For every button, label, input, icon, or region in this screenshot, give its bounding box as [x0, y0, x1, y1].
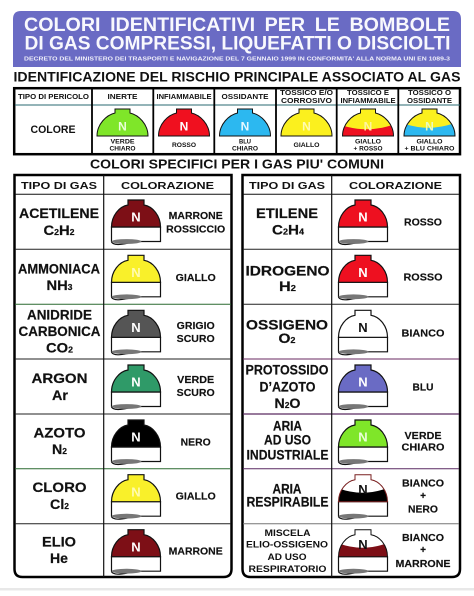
- header labels: INFIAMMABILE: [340, 98, 396, 105]
- row: ammoniaca: [18, 255, 216, 300]
- column headers: [21, 180, 214, 192]
- icon: tossico infiammabile: N: [364, 120, 372, 134]
- row: miscela elio-ossigeno: ELIO-OSSIGENO: [246, 540, 328, 551]
- row: anidride carbonica: ANIDRIDE: [27, 307, 92, 322]
- row: elio: MARRONE: [169, 546, 223, 557]
- row: ossigeno: BIANCO: [402, 329, 445, 340]
- row: cloro: CLORO: [32, 480, 86, 495]
- row: elio: [42, 530, 223, 574]
- icon: tossico corrosivo: GIALLO: [294, 142, 320, 149]
- row: aria uso industriale: ARIA: [273, 419, 302, 434]
- row: protossido d'azoto: [246, 362, 434, 411]
- row: cloro: N: [131, 484, 141, 499]
- row: ossigeno: [246, 310, 445, 355]
- header labels: INERTE: [108, 94, 138, 101]
- icon: inerte: [97, 109, 148, 152]
- icon: tossico infiammabile: [342, 108, 394, 150]
- icon: inerte: CHIARO: [110, 146, 136, 152]
- row: ossigeno: N: [358, 320, 368, 335]
- row: protossido d'azoto: BLU: [412, 383, 434, 394]
- icon: tossico ossidante: N: [425, 120, 434, 134]
- column headers: COLORAZIONE: [349, 180, 442, 192]
- row: argon: VERDE: [177, 375, 215, 386]
- row: idrogeno: ROSSO: [404, 273, 443, 284]
- header labels: TIPO DI PERICOLO: [18, 94, 90, 101]
- row: idrogeno: N: [358, 265, 368, 280]
- row: aria uso industriale: N: [358, 430, 368, 445]
- icon: tossico ossidante: [404, 108, 456, 150]
- row: azoto: N: [131, 430, 141, 445]
- row: anidride carbonica: CARBONICA: [18, 324, 101, 339]
- row: acetilene: MARRONE: [169, 211, 223, 222]
- icon: tossico ossidante: GIALLO: [416, 138, 443, 146]
- icon: inerte: N: [118, 120, 127, 134]
- row: etilene: ETILENE: [256, 206, 318, 221]
- row: idrogeno: H2: [279, 279, 297, 294]
- icon: ossidante: BLU: [239, 138, 251, 146]
- header labels: CORROSIVO: [281, 98, 333, 105]
- row: aria uso industriale: INDUSTRIALE: [246, 447, 328, 462]
- row: argon: ARGON: [32, 371, 88, 386]
- row: miscela elio-ossigeno: MARRONE: [396, 559, 451, 570]
- row: cloro: GIALLO: [176, 492, 216, 503]
- row: aria uso industriale: CHIARO: [402, 443, 445, 454]
- row: elio: ELIO: [42, 535, 76, 550]
- column headers: TIPO DI GAS: [249, 180, 325, 192]
- row: acetilene: [19, 200, 225, 244]
- header labels: TOSSICO O: [408, 90, 452, 97]
- row: ammoniaca: NH3: [46, 278, 73, 293]
- row: anidride carbonica: [18, 307, 215, 356]
- row: azoto: NERO: [181, 438, 211, 449]
- row: miscela elio-ossigeno: +: [420, 545, 426, 556]
- row: etilene: [256, 200, 442, 244]
- row: etilene: N: [358, 210, 368, 225]
- icon: inerte: VERDE: [110, 138, 135, 146]
- row: anidride carbonica: SCURO: [177, 334, 215, 345]
- icon: tossico corrosivo: N: [302, 120, 311, 134]
- icon: infiammabile: ROSSO: [172, 142, 196, 149]
- row: aria respirabile: N: [358, 482, 368, 497]
- icon: tossico infiammabile: GIALLO: [355, 138, 381, 146]
- header labels: [18, 90, 452, 105]
- row: aria respirabile: NERO: [408, 505, 438, 516]
- row: etilene: C2H4: [272, 222, 305, 237]
- row: ammoniaca: AMMONIACA: [18, 261, 100, 276]
- row: acetilene: C2H2: [44, 223, 75, 238]
- header labels: OSSIDANTE: [222, 94, 269, 101]
- title banner: [13, 11, 461, 67]
- row: argon: SCURO: [177, 388, 215, 399]
- row: miscela elio-ossigeno: [246, 528, 451, 575]
- icon: ossidante: [220, 109, 270, 152]
- row: acetilene: N: [131, 210, 141, 225]
- column headers: COLORAZIONE: [121, 180, 214, 192]
- row: ammoniaca: N: [131, 265, 141, 280]
- heading: specific colours: COLORI SPECIFICI PER I GAS PIU' COMUNI: [90, 156, 384, 172]
- icon: ossidante: N: [241, 120, 249, 134]
- row: aria respirabile: RESPIRABILE: [246, 494, 328, 509]
- panel: hazard table: [14, 88, 460, 154]
- decree subtitle: DECRETO DEL MINISTERO DEI TRASPORTI E NAVIGAZIONE DEL 7 GENNAIO 1999 IN CONFORMITA' ALLA NORMA UNI EN 1089-3: [24, 56, 450, 62]
- row: idrogeno: [246, 255, 443, 300]
- row: miscela elio-ossigeno: RESPIRATORIO: [248, 564, 326, 575]
- row: azoto: [34, 420, 211, 464]
- title line 2: DI GAS COMPRESSI, LIQUEFATTI O DISCIOLTI: [24, 34, 450, 54]
- icon: tossico infiammabile: + ROSSO: [354, 146, 383, 152]
- column headers: [249, 180, 442, 192]
- row: azoto: AZOTO: [34, 425, 86, 440]
- row: protossido d'azoto: N: [358, 375, 368, 390]
- row: aria respirabile: +: [420, 491, 426, 502]
- row: elio: He: [50, 551, 69, 566]
- row: etilene: ROSSO: [404, 218, 442, 229]
- row: argon: Ar: [52, 388, 69, 403]
- panel: left gas table: [14, 175, 232, 577]
- row: anidride carbonica: GRIGIO: [177, 321, 215, 332]
- row: elio: N: [131, 539, 141, 554]
- row: miscela elio-ossigeno: MISCELA: [264, 528, 311, 539]
- row: miscela elio-ossigeno: AD USO: [268, 552, 306, 563]
- row: anidride carbonica: N: [131, 320, 141, 335]
- row: aria uso industriale: [246, 419, 445, 464]
- column headers: TIPO DI GAS: [21, 180, 97, 192]
- icon: tossico corrosivo: [281, 109, 332, 149]
- row: miscela elio-ossigeno: BIANCO: [402, 533, 444, 544]
- title line 1: COLORI IDENTIFICATIVI PER LE BOMBOLE: [24, 15, 450, 36]
- row: aria respirabile: [246, 475, 444, 519]
- row: miscela elio-ossigeno: N: [358, 537, 368, 552]
- icon: infiammabile: [158, 109, 210, 149]
- row: acetilene: ACETILENE: [19, 206, 99, 221]
- row: aria uso industriale: AD USO: [264, 433, 311, 448]
- heading: risk identification: IDENTIFICAZIONE DEL RISCHIO PRINCIPALE ASSOCIATO AL GAS: [14, 70, 460, 84]
- header labels: TOSSICO E: [347, 90, 389, 97]
- row: aria respirabile: BIANCO: [402, 478, 444, 489]
- row: azoto: N2: [52, 442, 68, 457]
- row: aria respirabile: ARIA: [272, 482, 302, 497]
- row: argon: N: [131, 375, 141, 390]
- row: idrogeno: IDROGENO: [246, 264, 330, 279]
- page bottom band: [0, 588, 474, 590]
- row: aria uso industriale: VERDE: [404, 431, 442, 442]
- header labels: TOSSICO E/O: [280, 90, 334, 97]
- panel: right gas table: [242, 175, 460, 577]
- icon: tossico ossidante: + BLU CHIARO: [404, 146, 455, 152]
- row: ossigeno: O2: [278, 331, 296, 346]
- icon: infiammabile: N: [180, 120, 188, 134]
- row: ossigeno: OSSIGENO: [246, 317, 328, 332]
- row: protossido d'azoto: PROTOSSIDO: [246, 362, 328, 377]
- icon: ossidante: CHIARO: [232, 146, 258, 152]
- row: cloro: [32, 475, 216, 519]
- row label: colore: COLORE: [30, 124, 76, 136]
- header labels: INFIAMMABILE: [156, 94, 212, 101]
- row: cloro: Cl2: [50, 497, 70, 512]
- row: acetilene: ROSSICCIO: [166, 224, 225, 235]
- row: protossido d'azoto: D’AZOTO: [260, 379, 316, 394]
- row: ammoniaca: GIALLO: [176, 273, 216, 284]
- row: protossido d'azoto: N2O: [274, 396, 300, 411]
- row: argon: [32, 365, 215, 410]
- row: anidride carbonica: CO2: [46, 341, 74, 356]
- header labels: OSSIDANTE: [407, 98, 452, 105]
